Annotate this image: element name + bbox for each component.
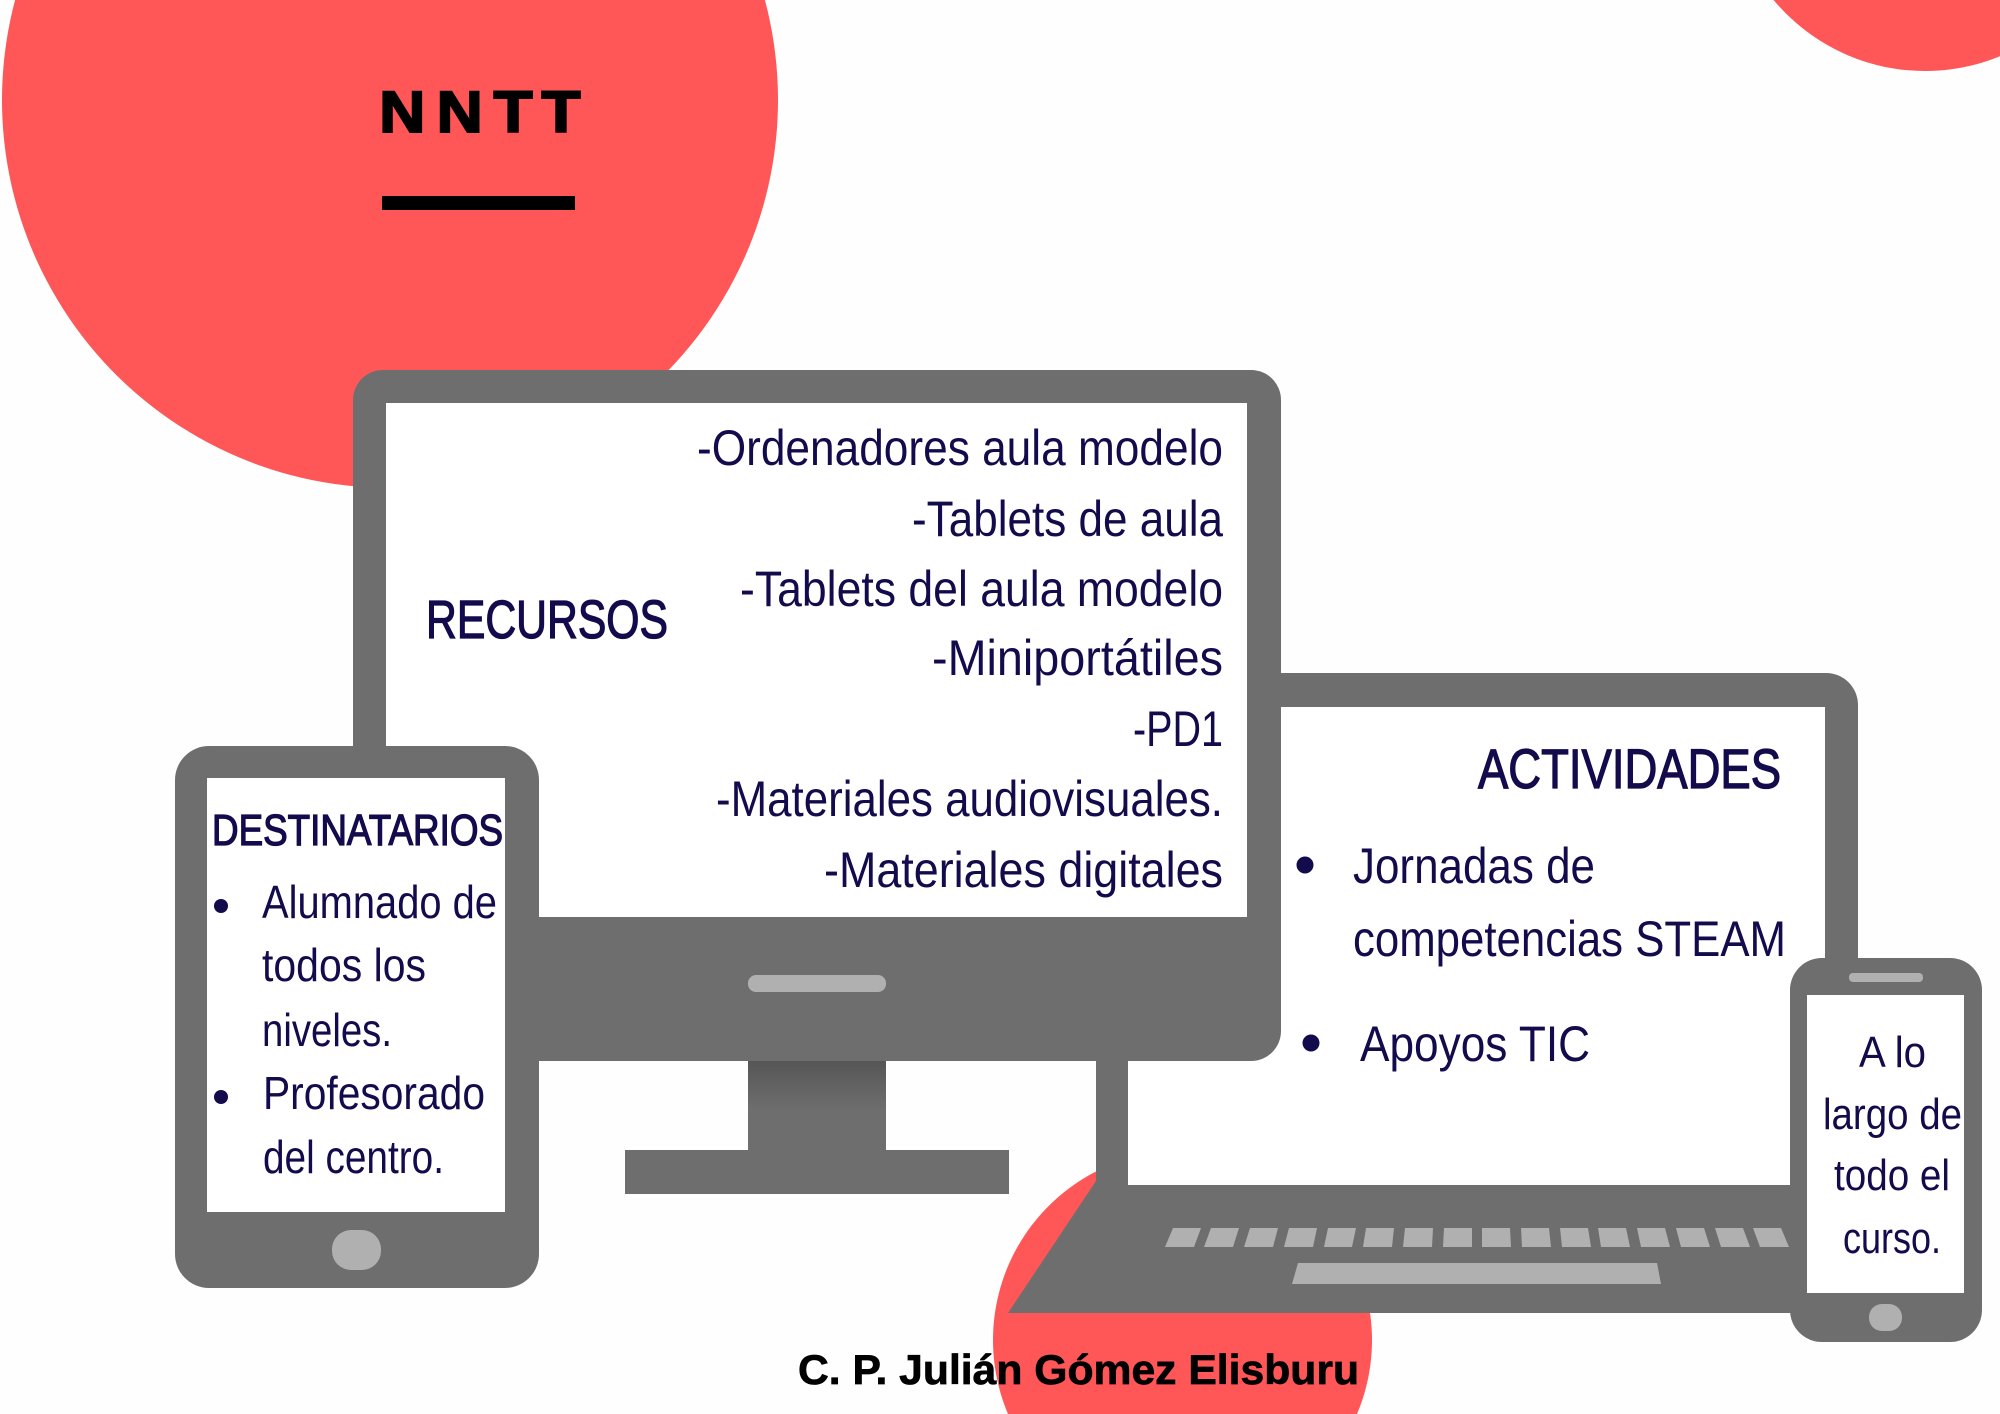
title bbox=[379, 80, 580, 210]
monitor screen bbox=[386, 403, 1247, 917]
bullet bbox=[214, 899, 228, 913]
destinatarios heading: DESTINATARIOS bbox=[212, 806, 503, 855]
item line: Alumnado de bbox=[262, 876, 497, 928]
item: jornadas, second line: competencias STEAM bbox=[1353, 911, 1786, 967]
title underline bbox=[382, 196, 575, 210]
text line: A lo bbox=[1859, 1028, 1926, 1077]
laptop screen bbox=[1128, 707, 1825, 1185]
item: -Materiales audiovisuales. bbox=[716, 771, 1223, 827]
decorative circle: top right bbox=[1774, 0, 2000, 71]
item line: todos los bbox=[262, 939, 426, 991]
phone text bbox=[1823, 1028, 1962, 1263]
bullet bbox=[1296, 856, 1314, 874]
item: -Tablets del aula modelo bbox=[740, 561, 1223, 617]
destinatarios list bbox=[214, 876, 497, 1183]
panel: laptop (actividades) bbox=[1008, 673, 1900, 1313]
decorative circle: top left bbox=[2, 0, 778, 488]
tablet body bbox=[175, 746, 539, 1288]
bullet bbox=[214, 1090, 228, 1104]
phone body bbox=[1790, 958, 1982, 1342]
actividades list bbox=[1296, 838, 1786, 1072]
monitor indicator bbox=[748, 975, 886, 992]
item: apoyos: Apoyos TIC bbox=[1360, 1016, 1590, 1072]
laptop keyboard keys bbox=[1165, 1228, 1789, 1247]
recursos list bbox=[697, 420, 1223, 898]
item: jornadas, first line: Jornadas de bbox=[1353, 838, 1595, 894]
panel: monitor (recursos) bbox=[353, 370, 1281, 1194]
panel: phone (temporalización) bbox=[1790, 958, 1982, 1342]
monitor stand bbox=[748, 1061, 886, 1151]
title text: NNTT bbox=[379, 80, 580, 144]
footer: school name: C. P. Julián Gómez Elisburu bbox=[798, 1346, 1359, 1393]
text line: curso. bbox=[1843, 1214, 1941, 1263]
item: -Tablets de aula bbox=[912, 491, 1223, 547]
actividades heading: ACTIVIDADES bbox=[1478, 737, 1781, 800]
phone speaker bbox=[1849, 973, 1923, 982]
item line: niveles. bbox=[262, 1004, 392, 1056]
recursos heading: RECURSOS bbox=[426, 590, 668, 650]
decorative circle: bottom centre bbox=[993, 1151, 1372, 1414]
laptop space bar bbox=[1292, 1263, 1661, 1284]
bullet bbox=[1302, 1034, 1320, 1052]
item: -Ordenadores aula modelo bbox=[697, 420, 1223, 476]
item: -PD1 bbox=[1133, 701, 1223, 757]
item: -Miniportátiles bbox=[932, 630, 1223, 686]
laptop base bbox=[1008, 1181, 1900, 1313]
tablet screen bbox=[207, 778, 505, 1212]
text line: todo el bbox=[1834, 1151, 1950, 1200]
panel: tablet (destinatarios) bbox=[175, 746, 539, 1288]
monitor body bbox=[353, 370, 1281, 1061]
item line: Profesorado bbox=[263, 1067, 485, 1119]
phone screen bbox=[1807, 995, 1964, 1293]
text line: largo de bbox=[1823, 1090, 1962, 1139]
monitor stand base bbox=[625, 1150, 1009, 1194]
phone button bbox=[1869, 1304, 1902, 1331]
item: -Materiales digitales bbox=[824, 842, 1223, 898]
item line: del centro. bbox=[263, 1131, 444, 1183]
laptop lid bbox=[1096, 673, 1858, 1233]
tablet button bbox=[332, 1230, 381, 1270]
